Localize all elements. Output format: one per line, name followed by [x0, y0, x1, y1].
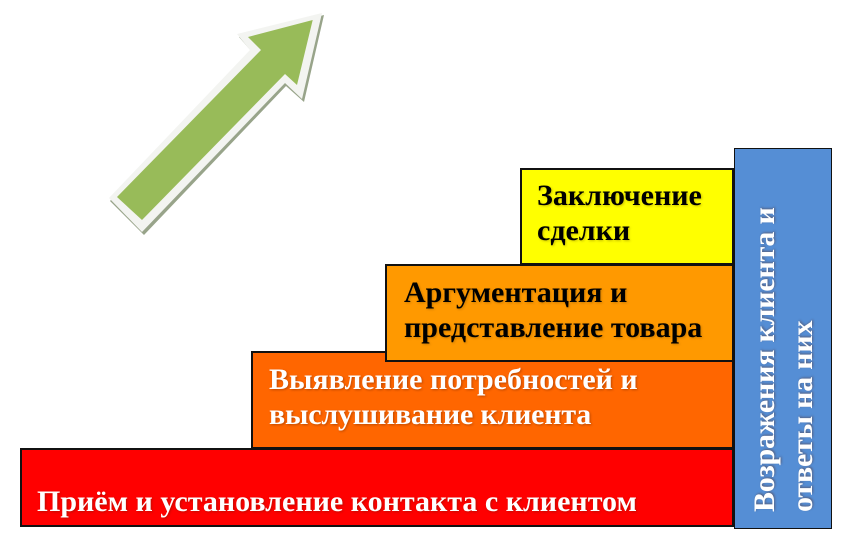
step 4 label — [537, 179, 703, 247]
step 2 label: выслушивание клиента — [269, 398, 591, 431]
step 1: greeting and establishing contact — [20, 448, 734, 527]
step 2 label: Выявление потребностей и — [269, 363, 638, 396]
step 3 label — [404, 276, 703, 346]
step 4: closing the deal — [520, 168, 734, 265]
step 3: argumentation and product presentation — [385, 264, 734, 362]
side panel label — [748, 206, 819, 512]
step 2 label — [269, 363, 638, 432]
step 4 label: сделки — [537, 214, 630, 247]
side panel: objections — [734, 148, 832, 529]
step 3 label: Аргументация и — [404, 276, 627, 309]
step 4 label: Заключение — [537, 179, 702, 212]
step 1 label: Приём и установление контакта с клиентом — [37, 485, 637, 518]
step 3 label: представление товара — [404, 311, 702, 344]
side panel label: ответы на них — [786, 321, 819, 512]
side panel label: Возражения клиента и — [748, 207, 781, 512]
step 2: needs discovery — [251, 351, 734, 449]
